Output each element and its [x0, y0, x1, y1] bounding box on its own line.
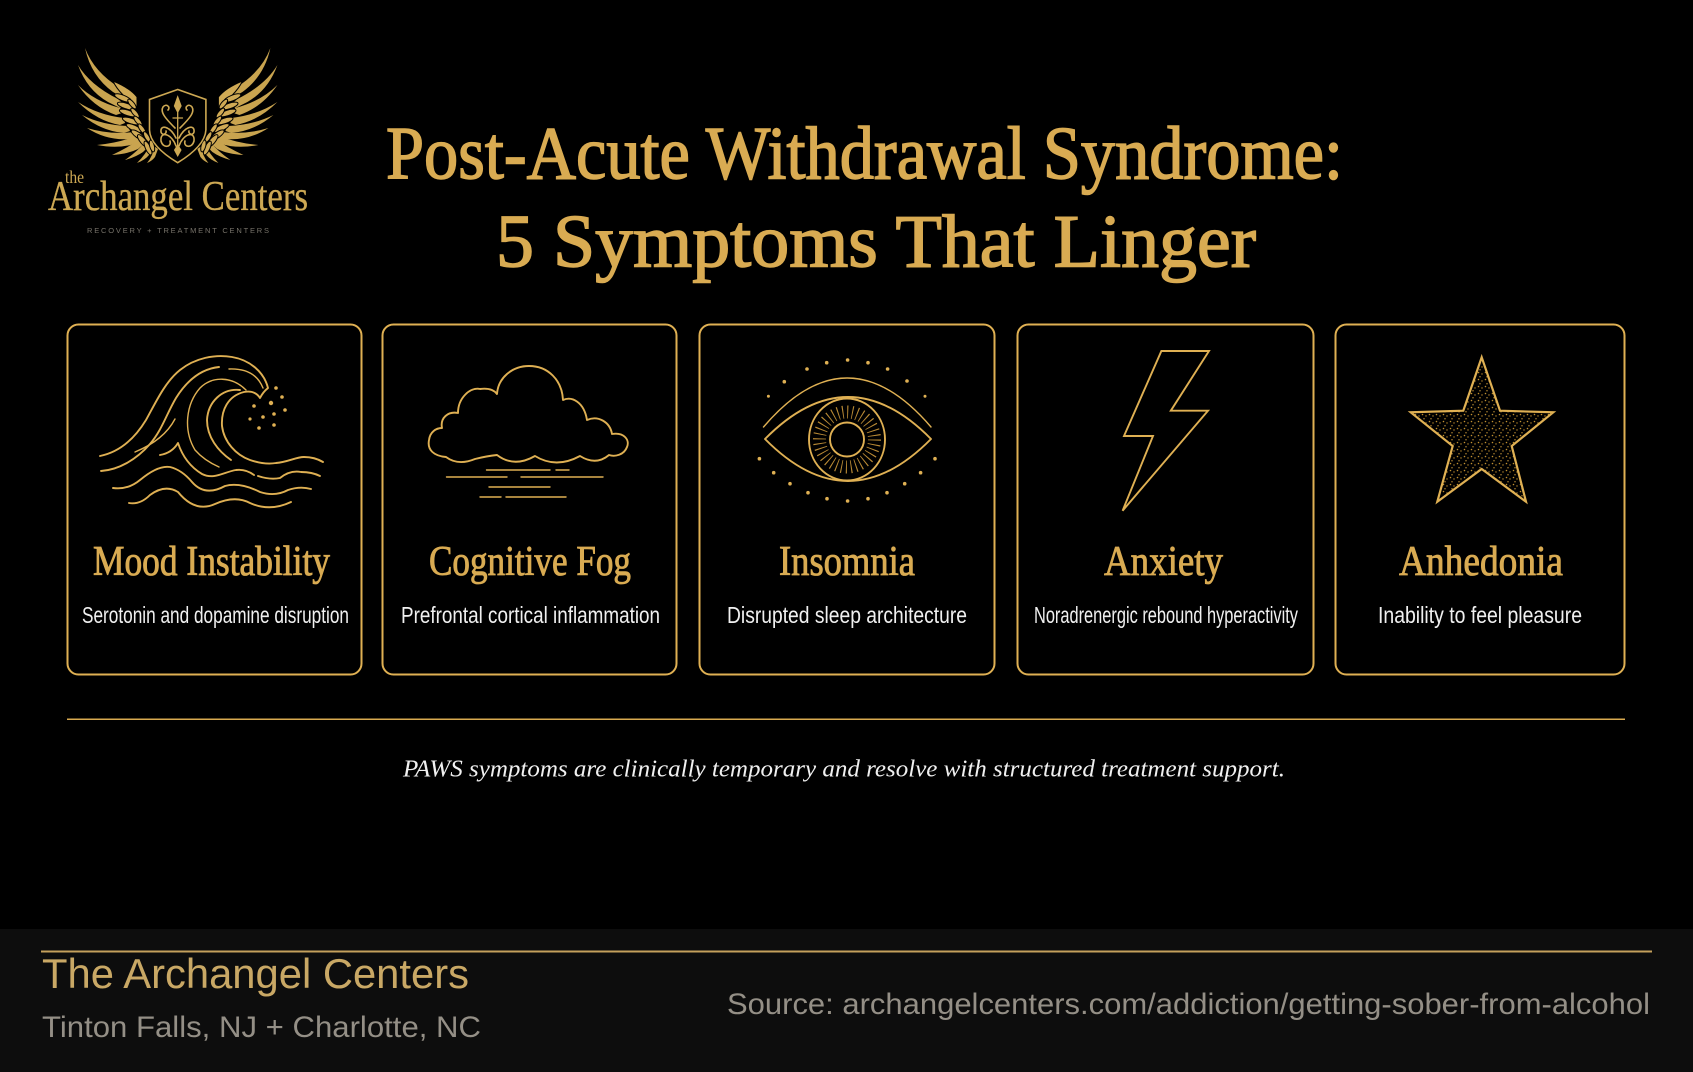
italic note: PAWS symptoms are clinically temporary and resolve with structured treatment support.	[402, 756, 1285, 782]
icon: cloud with fog	[429, 366, 628, 497]
panel: Anhedonia	[1336, 324, 1624, 674]
footer	[0, 929, 1693, 1072]
footer source: Source: archangelcenters.com/addiction/getting-sober-from-alcohol	[727, 988, 1650, 1021]
card heading: Insomnia	[779, 539, 915, 585]
icon: shield with fleur	[150, 90, 206, 163]
logo wordmark: Archangel Centers	[48, 174, 308, 220]
card description: Noradrenergic rebound hyperactivity	[1034, 602, 1298, 628]
panel: Cognitive Fog	[382, 324, 676, 674]
panel: Mood Instability	[68, 324, 362, 674]
footer locations: Tinton Falls, NJ + Charlotte, NC	[42, 1011, 481, 1044]
title	[386, 112, 1343, 284]
logo tagline: RECOVERY + TREATMENT CENTERS	[87, 226, 269, 235]
logo word: the: the	[65, 167, 84, 187]
panel: Insomnia	[700, 324, 994, 674]
icon: right wing	[197, 48, 277, 163]
title line 1: Post-Acute Withdrawal Syndrome:	[386, 112, 1343, 196]
card description: Disrupted sleep architecture	[727, 602, 967, 628]
logo: The Archangel Centers	[48, 48, 308, 235]
icon: eye	[758, 358, 937, 503]
footer organisation name: The Archangel Centers	[42, 950, 469, 997]
card description: Serotonin and dopamine disruption	[82, 602, 349, 628]
card heading: Cognitive Fog	[429, 539, 631, 585]
card heading: Anxiety	[1104, 539, 1223, 585]
icon: left wing	[78, 48, 158, 163]
icon: lightning bolt	[1123, 351, 1209, 511]
card heading: Anhedonia	[1399, 539, 1563, 585]
icon: wave	[100, 356, 323, 507]
card description: Prefrontal cortical inflammation	[401, 602, 660, 628]
card description: Inability to feel pleasure	[1378, 602, 1582, 628]
icon: stippled star	[1411, 357, 1553, 502]
panel: Anxiety	[1018, 324, 1314, 674]
title line 2: 5 Symptoms That Linger	[496, 200, 1256, 284]
card heading: Mood Instability	[93, 539, 330, 585]
